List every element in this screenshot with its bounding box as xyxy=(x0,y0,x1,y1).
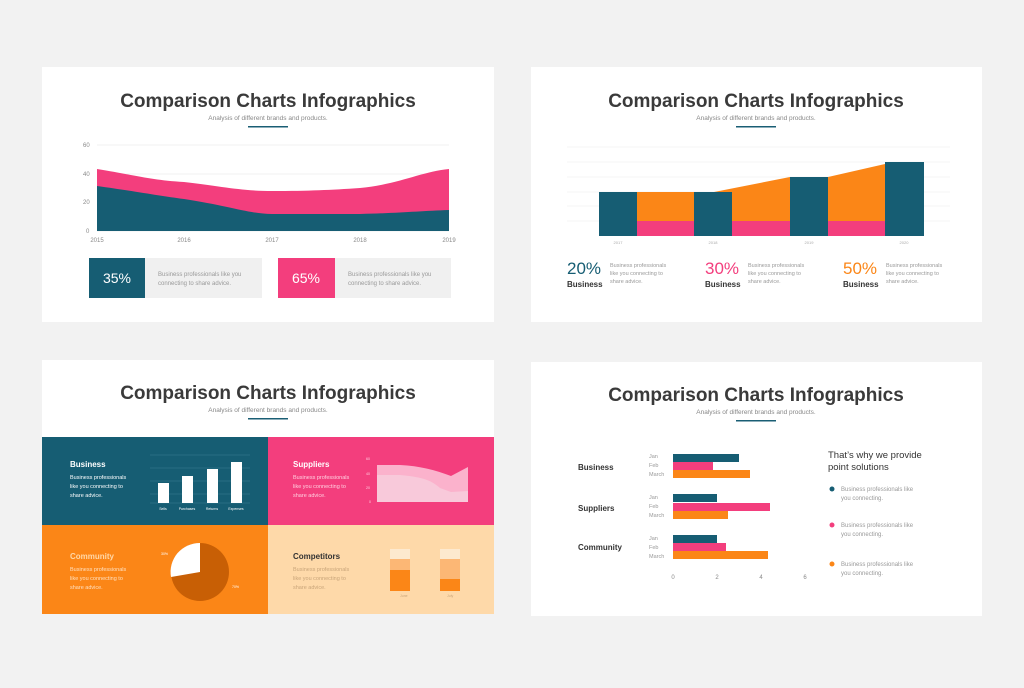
quadrant: business: Business xyxy=(70,460,106,469)
quadrant: suppliers: like you connecting to xyxy=(293,484,346,490)
stat: 50%: like you connecting to xyxy=(886,271,939,277)
panel: column chart: Analysis of different brands and products. xyxy=(696,115,816,122)
bar chart: Feb xyxy=(649,504,658,510)
legend text: Business professionals like xyxy=(841,523,914,529)
panel: area chart: 2016 xyxy=(177,238,191,244)
subtitle: Analysis of different brands and products. xyxy=(208,115,328,122)
stat: 50%: Business professionals xyxy=(886,263,943,269)
quadrant: competitors: share advice. xyxy=(293,585,326,591)
bar chart: Feb xyxy=(649,463,658,469)
panel: area chart: 2015 xyxy=(90,238,104,244)
stat: 20%: 20% xyxy=(567,259,601,278)
combo chart xyxy=(599,162,924,236)
panel: area chart: 2018 xyxy=(353,238,367,244)
panel: four quadrants xyxy=(42,360,494,614)
quadrant: community xyxy=(42,525,268,614)
bar chart: Jan xyxy=(649,536,658,542)
panel: horizontal bar chart: Analysis of different brands and products. xyxy=(696,409,816,416)
title: Comparison Charts Infographics xyxy=(608,91,904,112)
callout: 65% xyxy=(278,258,451,298)
stat: 30%: 30% xyxy=(705,259,739,278)
quadrant: business xyxy=(42,437,268,525)
stat: 20%: Business professionals xyxy=(610,263,667,269)
panel: area chart: 40 xyxy=(83,172,90,178)
callout: 65%: 65% xyxy=(292,270,320,286)
stat: 50%: share advice. xyxy=(886,279,919,285)
quadrant: competitors: like you connecting to xyxy=(293,576,346,582)
panel: area chart: 0 xyxy=(86,229,90,235)
legend text: That’s why we provide xyxy=(828,450,922,461)
stat: 30%: share advice. xyxy=(748,279,781,285)
stat: 20% xyxy=(567,259,667,289)
quadrant: suppliers: 0 xyxy=(369,500,371,504)
quadrant: business: Purchases xyxy=(179,507,196,511)
stat: 50%: Business xyxy=(843,280,879,289)
quadrant: suppliers: 60 xyxy=(366,457,370,461)
quadrant: competitors: Business professionals xyxy=(293,567,350,573)
quadrant: business: Sells xyxy=(159,507,167,511)
legend text: Business professionals like xyxy=(841,487,914,493)
area chart xyxy=(97,169,449,231)
panel: column chart xyxy=(531,67,982,322)
quadrant: business: Business professionals xyxy=(70,475,127,481)
bar chart: 6 xyxy=(803,575,807,581)
title: Comparison Charts Infographics xyxy=(608,385,904,406)
panel: column chart: 2017 xyxy=(614,240,623,245)
panel: area chart: 2019 xyxy=(442,238,456,244)
panel: area chart: 2017 xyxy=(265,238,279,244)
bar chart: Business xyxy=(578,463,614,472)
legend text: you connecting. xyxy=(841,532,883,538)
legend text: you connecting. xyxy=(841,496,883,502)
legend text xyxy=(828,450,922,577)
quadrant: competitors xyxy=(268,525,494,614)
bar chart xyxy=(578,454,807,581)
callout: 35%: 35% xyxy=(103,270,131,286)
bar chart: Suppliers xyxy=(578,504,615,513)
panel: four quadrants: Analysis of different brands and products. xyxy=(208,407,328,414)
quadrant: suppliers: share advice. xyxy=(293,493,326,499)
panel: column chart: 2019 xyxy=(805,240,814,245)
bar chart: 2 xyxy=(715,575,719,581)
title: Comparison Charts Infographics xyxy=(120,91,416,112)
quadrant: business: like you connecting to xyxy=(70,484,123,490)
bar chart: March xyxy=(649,472,664,478)
panel: column chart: 2018 xyxy=(709,240,718,245)
quadrant: business: Returns xyxy=(206,507,218,511)
quadrant: competitors: June xyxy=(400,594,408,598)
bar chart: 4 xyxy=(759,575,763,581)
quadrant: suppliers xyxy=(268,437,494,525)
bar chart: Jan xyxy=(649,495,658,501)
stat: 30%: like you connecting to xyxy=(748,271,801,277)
quadrant: suppliers: Business professionals xyxy=(293,475,350,481)
title: Comparison Charts Infographics xyxy=(120,383,416,404)
panel: area chart: 20 xyxy=(83,200,90,206)
stat: 30% xyxy=(705,259,805,289)
stat: 20%: like you connecting to xyxy=(610,271,663,277)
bar chart: Jan xyxy=(649,454,658,460)
quadrant: community: like you connecting to xyxy=(70,576,123,582)
quadrant: community: Business professionals xyxy=(70,567,127,573)
panel: column chart: 2020 xyxy=(900,240,909,245)
stat: 20%: Business xyxy=(567,280,603,289)
stat: 30%: Business professionals xyxy=(748,263,805,269)
callout: 65%: Business professionals like you xyxy=(348,272,431,278)
bar chart: March xyxy=(649,554,664,560)
legend text: you connecting. xyxy=(841,571,883,577)
quadrant: business: share advice. xyxy=(70,493,103,499)
quadrant: community: 30% xyxy=(161,552,168,556)
quadrant: suppliers: 20 xyxy=(366,486,370,490)
stat: 30%: Business xyxy=(705,280,741,289)
quadrant: competitors: July xyxy=(447,594,453,598)
bar chart: Community xyxy=(578,543,623,552)
bar chart: 0 xyxy=(671,575,675,581)
callout: 35% xyxy=(89,258,262,298)
quadrant: community: Community xyxy=(70,552,115,561)
callout: 35%: Business professionals like you xyxy=(158,272,241,278)
panel: area chart: 60 xyxy=(83,143,90,149)
quadrant: community: 70% xyxy=(232,585,239,589)
legend text: point solutions xyxy=(828,462,889,473)
stat: 50% xyxy=(843,259,943,289)
quadrant: business: Expenses xyxy=(228,507,244,511)
stat: 50%: 50% xyxy=(843,259,877,278)
quadrant: community: share advice. xyxy=(70,585,103,591)
bar chart: Feb xyxy=(649,545,658,551)
panel: area chart xyxy=(42,67,494,322)
quadrant: suppliers: Suppliers xyxy=(293,460,330,469)
quadrant: competitors: Competitors xyxy=(293,552,341,561)
bar chart: March xyxy=(649,513,664,519)
stat: 20%: share advice. xyxy=(610,279,643,285)
callout: 65%: connecting to share advice. xyxy=(348,281,421,287)
panel: horizontal bar chart xyxy=(531,362,982,616)
callout: 35%: connecting to share advice. xyxy=(158,281,231,287)
legend text: Business professionals like xyxy=(841,562,914,568)
quadrant: suppliers: 40 xyxy=(366,472,370,476)
